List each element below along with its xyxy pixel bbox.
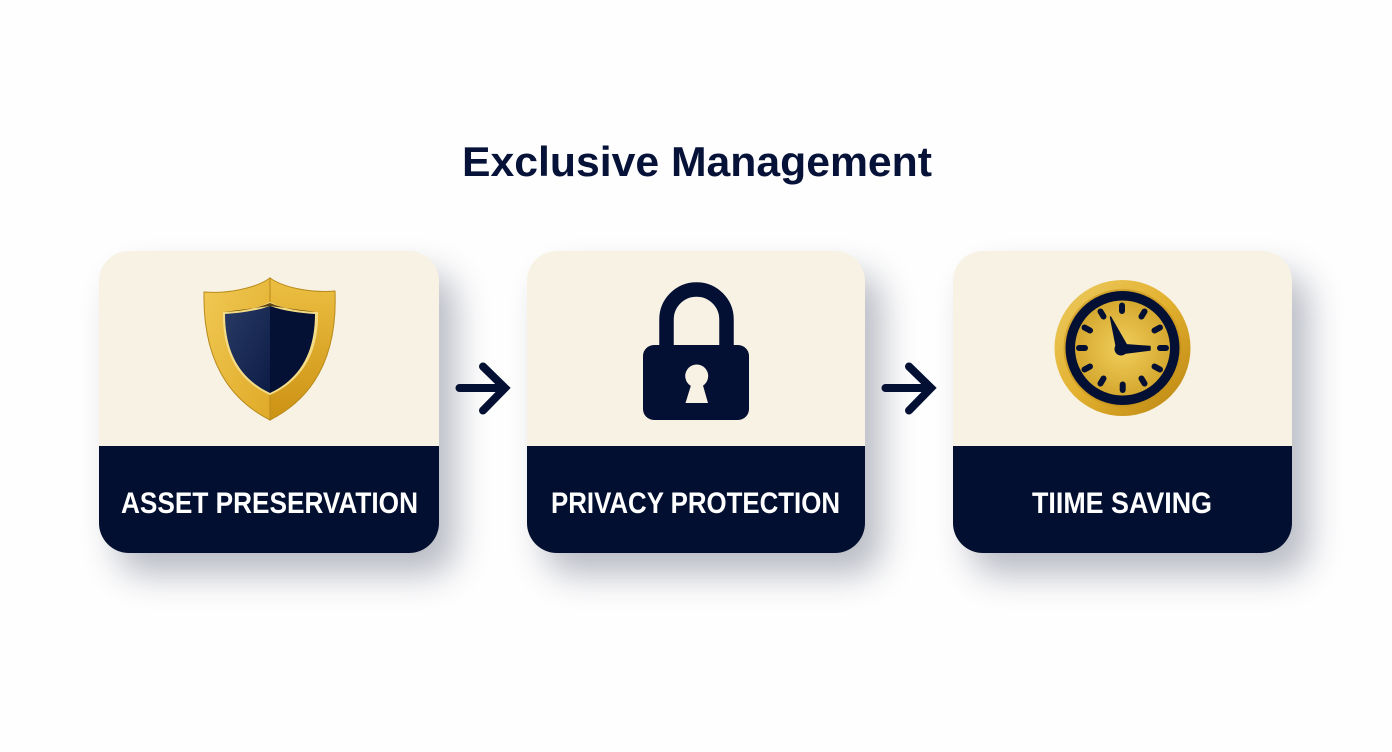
icon: clock (1054, 280, 1190, 416)
label band: time saving (953, 446, 1292, 553)
panel: privacy protection (527, 251, 865, 553)
label band: asset preservation (99, 446, 439, 553)
panel: asset preservation (99, 251, 439, 553)
icon: padlock (643, 282, 749, 420)
arrow: first to second (456, 362, 511, 414)
arrow: second to third (882, 362, 937, 414)
label band: privacy protection (527, 446, 865, 553)
label band: privacy protection: PRIVACY PROTECTION (551, 487, 840, 520)
label band: asset preservation: ASSET PRESERVATION (121, 487, 418, 520)
panel: time saving (953, 251, 1292, 553)
label band: time saving: TIIME SAVING (1032, 487, 1212, 520)
title: Exclusive Management (462, 138, 932, 185)
icon: shield (203, 277, 336, 421)
